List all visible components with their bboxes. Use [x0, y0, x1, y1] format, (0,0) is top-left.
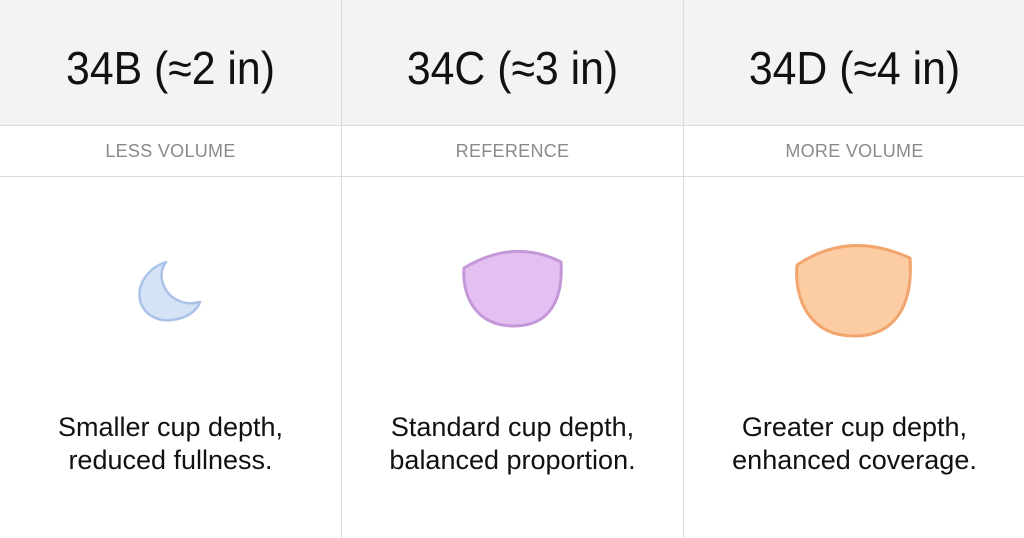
text: description: balanced proportion. — [389, 445, 636, 475]
text: description: enhanced coverage. — [732, 445, 977, 475]
text: description — [389, 412, 636, 475]
subtitle: more volume: MORE VOLUME — [785, 141, 924, 161]
text: description: Smaller cup depth, — [58, 412, 283, 442]
panel: 34C — [389, 42, 636, 475]
title: 34B: 34B (≈2 in) — [66, 42, 275, 94]
text: description: Greater cup depth, — [742, 412, 967, 442]
subtitle: less volume: LESS VOLUME — [105, 141, 236, 161]
subtitle: reference: REFERENCE — [456, 141, 569, 161]
panel: 34D — [732, 42, 977, 475]
icon: orange cup — [795, 244, 912, 338]
text: description: reduced fullness. — [68, 445, 273, 475]
panel: 34B — [58, 42, 283, 475]
text: description: Standard cup depth, — [391, 412, 634, 442]
icon: purple cup — [462, 250, 563, 328]
title: 34C: 34C (≈3 in) — [407, 42, 618, 94]
text: description — [732, 412, 977, 475]
icon: crescent moon — [138, 260, 202, 322]
title: 34D: 34D (≈4 in) — [749, 42, 960, 94]
text: description — [58, 412, 283, 475]
